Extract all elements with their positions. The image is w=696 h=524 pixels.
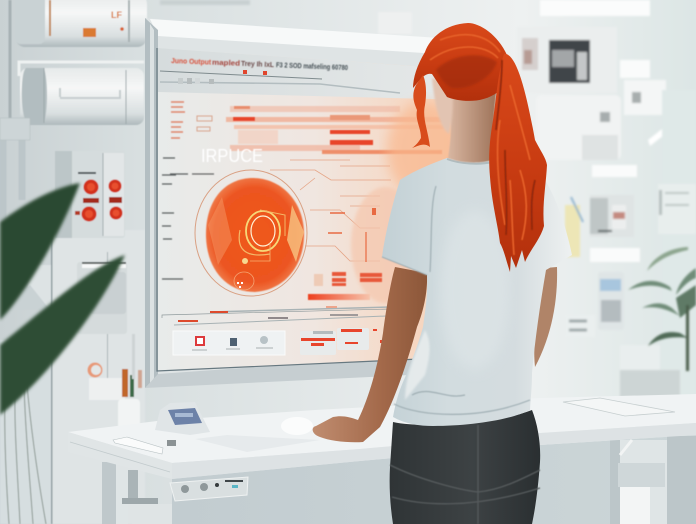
loose lock [412, 75, 430, 148]
ponytail [489, 54, 547, 272]
far right panel [658, 90, 696, 400]
globe chart [195, 170, 307, 296]
crown shadow [436, 55, 497, 88]
cylinder unit top: LF [111, 10, 122, 20]
small box [624, 80, 666, 115]
under desk wall [172, 435, 696, 524]
desk leg right [610, 436, 696, 524]
header text: mapled [212, 58, 241, 68]
cheek [432, 78, 453, 134]
blue cable [571, 197, 583, 222]
device with screen [598, 272, 624, 330]
right notebook [563, 398, 675, 416]
desk [68, 394, 696, 524]
small cap [167, 440, 176, 446]
desk front edge [172, 423, 696, 479]
faint second globe [351, 187, 419, 303]
gradient bar [308, 294, 370, 300]
desk top [68, 394, 696, 463]
left wall equipment [0, 0, 147, 524]
hair crown [413, 23, 508, 101]
phone [113, 437, 163, 454]
screen [158, 48, 470, 371]
bottom right widgets [300, 328, 386, 355]
mouse [281, 417, 313, 435]
pants folds [390, 425, 540, 524]
neck [448, 85, 497, 162]
data bars [226, 106, 446, 154]
lower timeline [162, 306, 410, 325]
heatmap grids [314, 272, 382, 286]
bottom icon strip [173, 331, 285, 355]
desk leg left [102, 462, 172, 524]
wall socket box [77, 262, 127, 334]
IRPUCE label: IRPUCE [201, 146, 263, 166]
circuit traces [270, 160, 391, 261]
desk tablet device [155, 402, 210, 435]
screen device [517, 27, 617, 93]
control box with red buttons [55, 151, 125, 238]
top shelf light [540, 0, 650, 16]
near arm and hand [313, 267, 427, 442]
light bar [648, 118, 678, 146]
glow behind woman [387, 102, 463, 198]
keyboard [195, 435, 320, 452]
header text: F3 2 SOD mafseling 60780 [276, 60, 348, 72]
desk control panel [170, 477, 248, 501]
cables [3, 0, 46, 524]
tape roll and pen shelf [88, 334, 142, 400]
lower panel boxes [565, 315, 680, 398]
cylinder unit middle [20, 68, 144, 125]
white bottle [118, 399, 140, 432]
shelves [590, 60, 650, 262]
junction box [0, 118, 30, 140]
left column labels [162, 102, 214, 279]
far arm [534, 267, 557, 367]
foreground plant leaves [0, 183, 125, 415]
header text: Juno Output [171, 56, 212, 67]
header text [171, 56, 348, 72]
shirt body [382, 158, 572, 426]
right wall equipment [517, 0, 696, 400]
hair highlights [430, 35, 530, 255]
header rules [160, 70, 400, 93]
woman [313, 23, 572, 524]
wall display frame [145, 18, 470, 388]
printer unit [536, 95, 621, 160]
top wall box [160, 0, 412, 34]
wall unit [590, 195, 634, 237]
lower left wall panels [0, 230, 145, 524]
header text: Trey Ih IxL [241, 59, 275, 69]
pants [390, 410, 540, 524]
shirt folds [382, 186, 530, 414]
wall box left [8, 265, 51, 310]
beige object [565, 205, 580, 257]
cylinder unit top [15, 0, 147, 47]
right plant [628, 247, 696, 371]
cylinder bracket [19, 62, 144, 76]
shirt collar [447, 159, 492, 164]
